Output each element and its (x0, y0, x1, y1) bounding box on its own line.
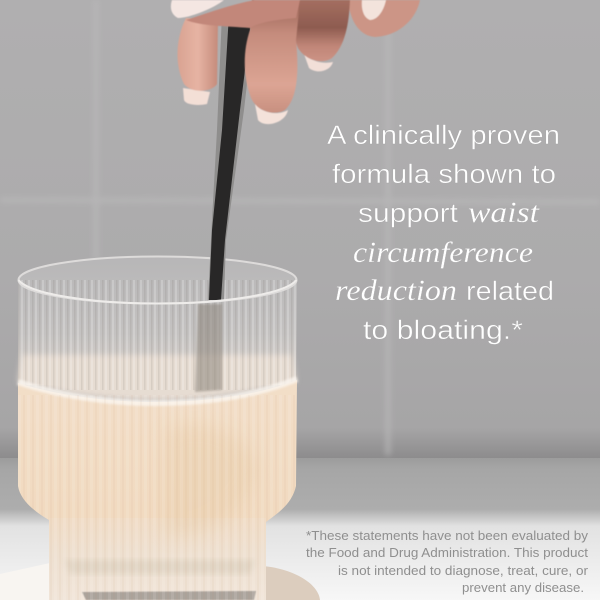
upper glass, empty section (18, 256, 297, 385)
headline: reduction (335, 274, 457, 307)
residue in liquid (165, 424, 258, 536)
foam layer (18, 355, 296, 401)
upper glass ribs (18, 280, 297, 390)
FDA disclaimer: the Food and Drug Administration. This product (306, 546, 589, 560)
glass with liquid (18, 256, 297, 600)
background wall with tile grid (0, 0, 600, 460)
index finger (177, 18, 218, 91)
glass rim (18, 256, 296, 304)
headline: A clinically proven (327, 120, 560, 150)
refracted spoon (195, 304, 222, 392)
FDA disclaimer (306, 529, 589, 595)
FDA disclaimer: is not intended to diagnose, treat, cure, or (338, 564, 588, 578)
index fingernail (183, 88, 210, 105)
marble table surface (0, 458, 600, 600)
headline: related (466, 276, 554, 306)
upper finger across (186, 0, 300, 28)
headline (327, 120, 560, 345)
headline: formula shown to (332, 159, 556, 189)
ring finger (293, 0, 350, 61)
spoon outer edge (208, 14, 255, 300)
liquid body (18, 380, 297, 545)
hand holding spoon (171, 0, 420, 124)
ring fingernail (304, 54, 333, 71)
headline: support (358, 198, 459, 228)
front rim edge (18, 280, 296, 304)
vertical ribs in liquid (18, 395, 297, 600)
foot sediment band (65, 560, 255, 574)
pinky nail (362, 0, 386, 20)
FDA disclaimer: prevent any disease. (462, 581, 584, 595)
headline: to bloating.* (363, 315, 524, 345)
foot shadow band (82, 591, 256, 600)
spoon (208, 14, 255, 300)
middle fingernail (255, 104, 288, 124)
middle finger (245, 0, 300, 113)
foam surface highlight (18, 379, 297, 403)
headline: circumference (353, 236, 533, 269)
thumb nail (171, 0, 224, 18)
glass foot (49, 518, 266, 600)
headline: waist (468, 196, 540, 229)
white and beige saucer (0, 563, 320, 600)
FDA disclaimer: *These statements have not been evaluated by (306, 529, 589, 543)
pinky finger (348, 0, 420, 37)
spoon dark core (209, 14, 252, 300)
